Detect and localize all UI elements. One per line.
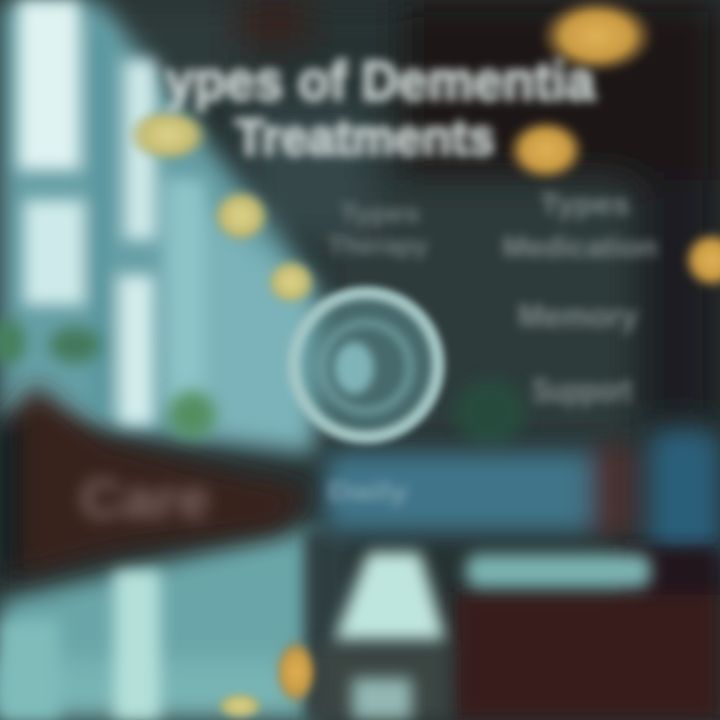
title: Treatments — [235, 109, 495, 167]
window wall — [0, 0, 320, 455]
title — [165, 49, 596, 167]
blue bench — [325, 430, 720, 565]
text block: right column labels — [502, 188, 658, 410]
text block: right column labels: Support — [532, 372, 632, 410]
text block: left column label: Therapy — [328, 230, 429, 260]
plants — [0, 320, 526, 444]
window panes — [18, 0, 204, 425]
text block: bench label: Daily — [328, 476, 409, 506]
circular emblem — [294, 293, 438, 437]
text block: right column labels: Types — [540, 188, 630, 221]
text block: left column label: Types — [340, 198, 420, 228]
tables — [315, 545, 720, 720]
floor — [0, 525, 320, 720]
text block: right column labels: Memory — [518, 298, 638, 334]
text block: sofa label: Care — [80, 467, 210, 530]
title: ypes of Dementia — [165, 49, 596, 112]
brown sofa — [0, 385, 310, 575]
text block: left column label — [328, 198, 429, 260]
text block: right column labels: Medication — [502, 231, 658, 264]
